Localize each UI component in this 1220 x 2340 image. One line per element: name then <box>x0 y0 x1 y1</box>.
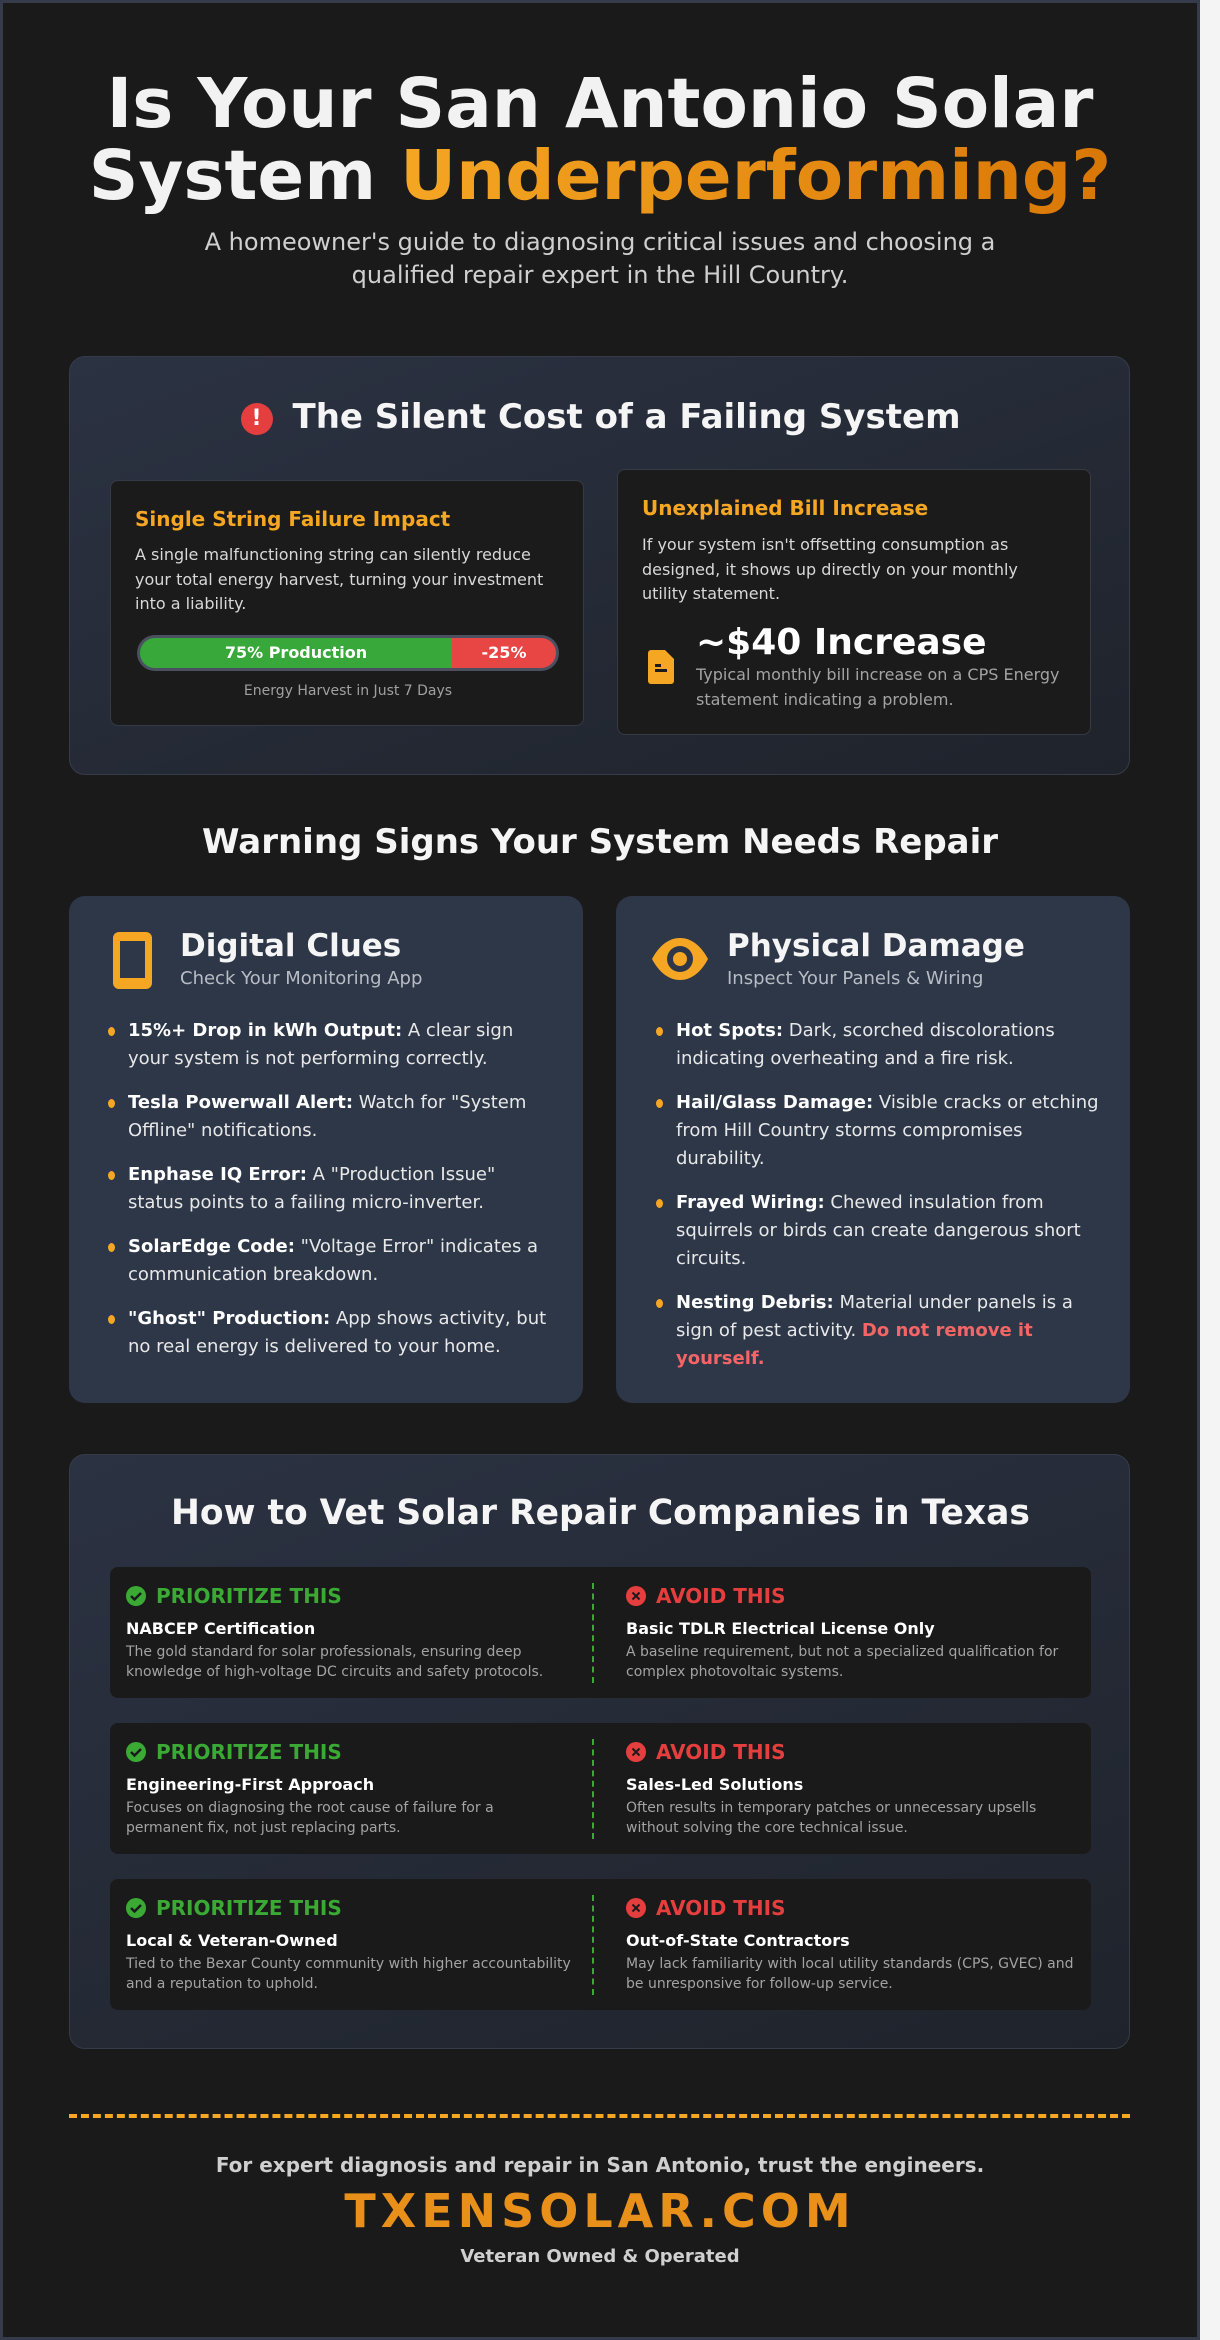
footer brand: TXENSOLAR.COM <box>344 2184 856 2238</box>
row 2 <box>110 1723 1091 1854</box>
panel: physical damage: Nesting Debris: Material under panels is a sign of pest activity. Do not remove it yourself. <box>676 1292 1073 1369</box>
card: bill increase: If your system isn't offsetting consumption as designed, it shows up directly on your monthly utility statement. <box>642 535 1018 603</box>
panel: digital clues <box>69 896 583 1403</box>
panel: digital clues: Tesla Powerwall Alert: Watch for "System Offline" notifications. <box>128 1092 526 1141</box>
row 3: Local & Veteran-Owned <box>126 1931 338 1950</box>
row 3: May lack familiarity with local utility standards (CPS, GVEC) and be unresponsive for follow-up service. <box>626 1956 1073 1992</box>
row 3: PRIORITIZE THIS <box>156 1896 342 1920</box>
footer text: For expert diagnosis and repair in San Antonio, trust the engineers. <box>216 2153 984 2177</box>
heading: silent cost: ! <box>251 406 262 431</box>
title: System Underperforming? <box>89 136 1111 216</box>
panel: physical damage: Hail/Glass Damage: Visible cracks or etching from Hill Country storms compromises durability. <box>676 1092 1099 1169</box>
row 1: NABCEP Certification <box>126 1619 315 1638</box>
heading: warning signs: Warning Signs Your System Needs Repair <box>202 822 998 862</box>
panel: silent cost <box>69 356 1130 775</box>
row 1: A baseline requirement, but not a specialized qualification for complex photovoltaic systems. <box>626 1644 1058 1680</box>
panel: physical damage: Inspect Your Panels & Wiring <box>727 968 983 989</box>
icon: phone <box>113 932 152 989</box>
panel: physical damage: Frayed Wiring: Chewed insulation from squirrels or birds can create dangerous short circuits. <box>676 1192 1081 1269</box>
card: bill increase: ~$40 Increase <box>696 622 987 663</box>
bar: production: -25% <box>482 643 526 662</box>
card: single string failure: Energy Harvest in Just 7 Days <box>244 683 452 699</box>
row 1: AVOID THIS <box>656 1584 785 1608</box>
heading: silent cost: The Silent Cost of a Failing System <box>292 397 960 437</box>
card: single string failure <box>110 480 584 726</box>
row 2: Engineering-First Approach <box>126 1775 374 1794</box>
card: bill increase <box>617 469 1091 735</box>
row 3 <box>110 1879 1091 2010</box>
panel: digital clues: "Ghost" Production: App shows activity, but no real energy is delivered to your home. <box>128 1308 546 1357</box>
row 1: The gold standard for solar professionals, ensuring deep knowledge of high-voltage DC circuits and safety protocols. <box>126 1644 543 1680</box>
row 2: PRIORITIZE THIS <box>156 1740 342 1764</box>
card: single string failure: Single String Failure Impact <box>135 507 450 531</box>
bar: production: 75% Production <box>225 643 367 662</box>
row 2: Focuses on diagnosing the root cause of failure for a permanent fix, not just replacing parts. <box>126 1800 494 1836</box>
icon: eye <box>652 938 708 980</box>
panel: digital clues: SolarEdge Code: "Voltage Error" indicates a communication breakdown. <box>128 1236 538 1285</box>
subtitle: A homeowner's guide to diagnosing critical issues and choosing a <box>205 228 995 256</box>
row 2: Sales-Led Solutions <box>626 1775 803 1794</box>
row 1 <box>110 1567 1091 1698</box>
row 3: AVOID THIS <box>656 1896 785 1920</box>
panel: digital clues: status points to a failing micro-inverter. <box>128 1192 484 1213</box>
card: single string failure: A single malfunctioning string can silently reduce your total energy harvest, turning your investment into a liability. <box>135 545 543 613</box>
panel: digital clues: Enphase IQ Error: A "Production Issue" <box>128 1164 495 1185</box>
bar: production <box>137 635 559 671</box>
panel: digital clues: Check Your Monitoring App <box>180 968 422 989</box>
icon: document <box>648 650 674 684</box>
footer tagline: Veteran Owned & Operated <box>460 2246 740 2267</box>
heading: vet: How to Vet Solar Repair Companies in Texas <box>171 1493 1030 1533</box>
row 1: PRIORITIZE THIS <box>156 1584 342 1608</box>
row 2: AVOID THIS <box>656 1740 785 1764</box>
row 2: Often results in temporary patches or unnecessary upsells without solving the core technical issue. <box>626 1800 1036 1836</box>
panel: physical damage: Hot Spots: Dark, scorched discolorations indicating overheating and a fire risk. <box>676 1020 1055 1069</box>
title <box>89 64 1111 216</box>
title: Is Your San Antonio Solar <box>107 64 1093 144</box>
card: bill increase: Unexplained Bill Increase <box>642 496 928 520</box>
panel: digital clues: 15%+ Drop in kWh Output: A clear sign your system is not performing correctly. <box>128 1020 513 1069</box>
panel: physical damage <box>616 896 1130 1403</box>
footer divider <box>69 2114 1130 2118</box>
subtitle: qualified repair expert in the Hill Country. <box>352 261 848 289</box>
panel: physical damage: Physical Damage <box>727 928 1025 964</box>
row 1: Basic TDLR Electrical License Only <box>626 1619 935 1638</box>
subtitle <box>204 228 995 289</box>
row 3: Out-of-State Contractors <box>626 1931 850 1950</box>
panel: digital clues: Digital Clues <box>180 928 401 964</box>
panel: vet companies <box>69 1454 1130 2049</box>
card: bill increase: Typical monthly bill increase on a CPS Energy statement indicating a problem. <box>696 665 1060 708</box>
row 3: Tied to the Bexar County community with higher accountability and a reputation to uphold. <box>126 1956 571 1992</box>
